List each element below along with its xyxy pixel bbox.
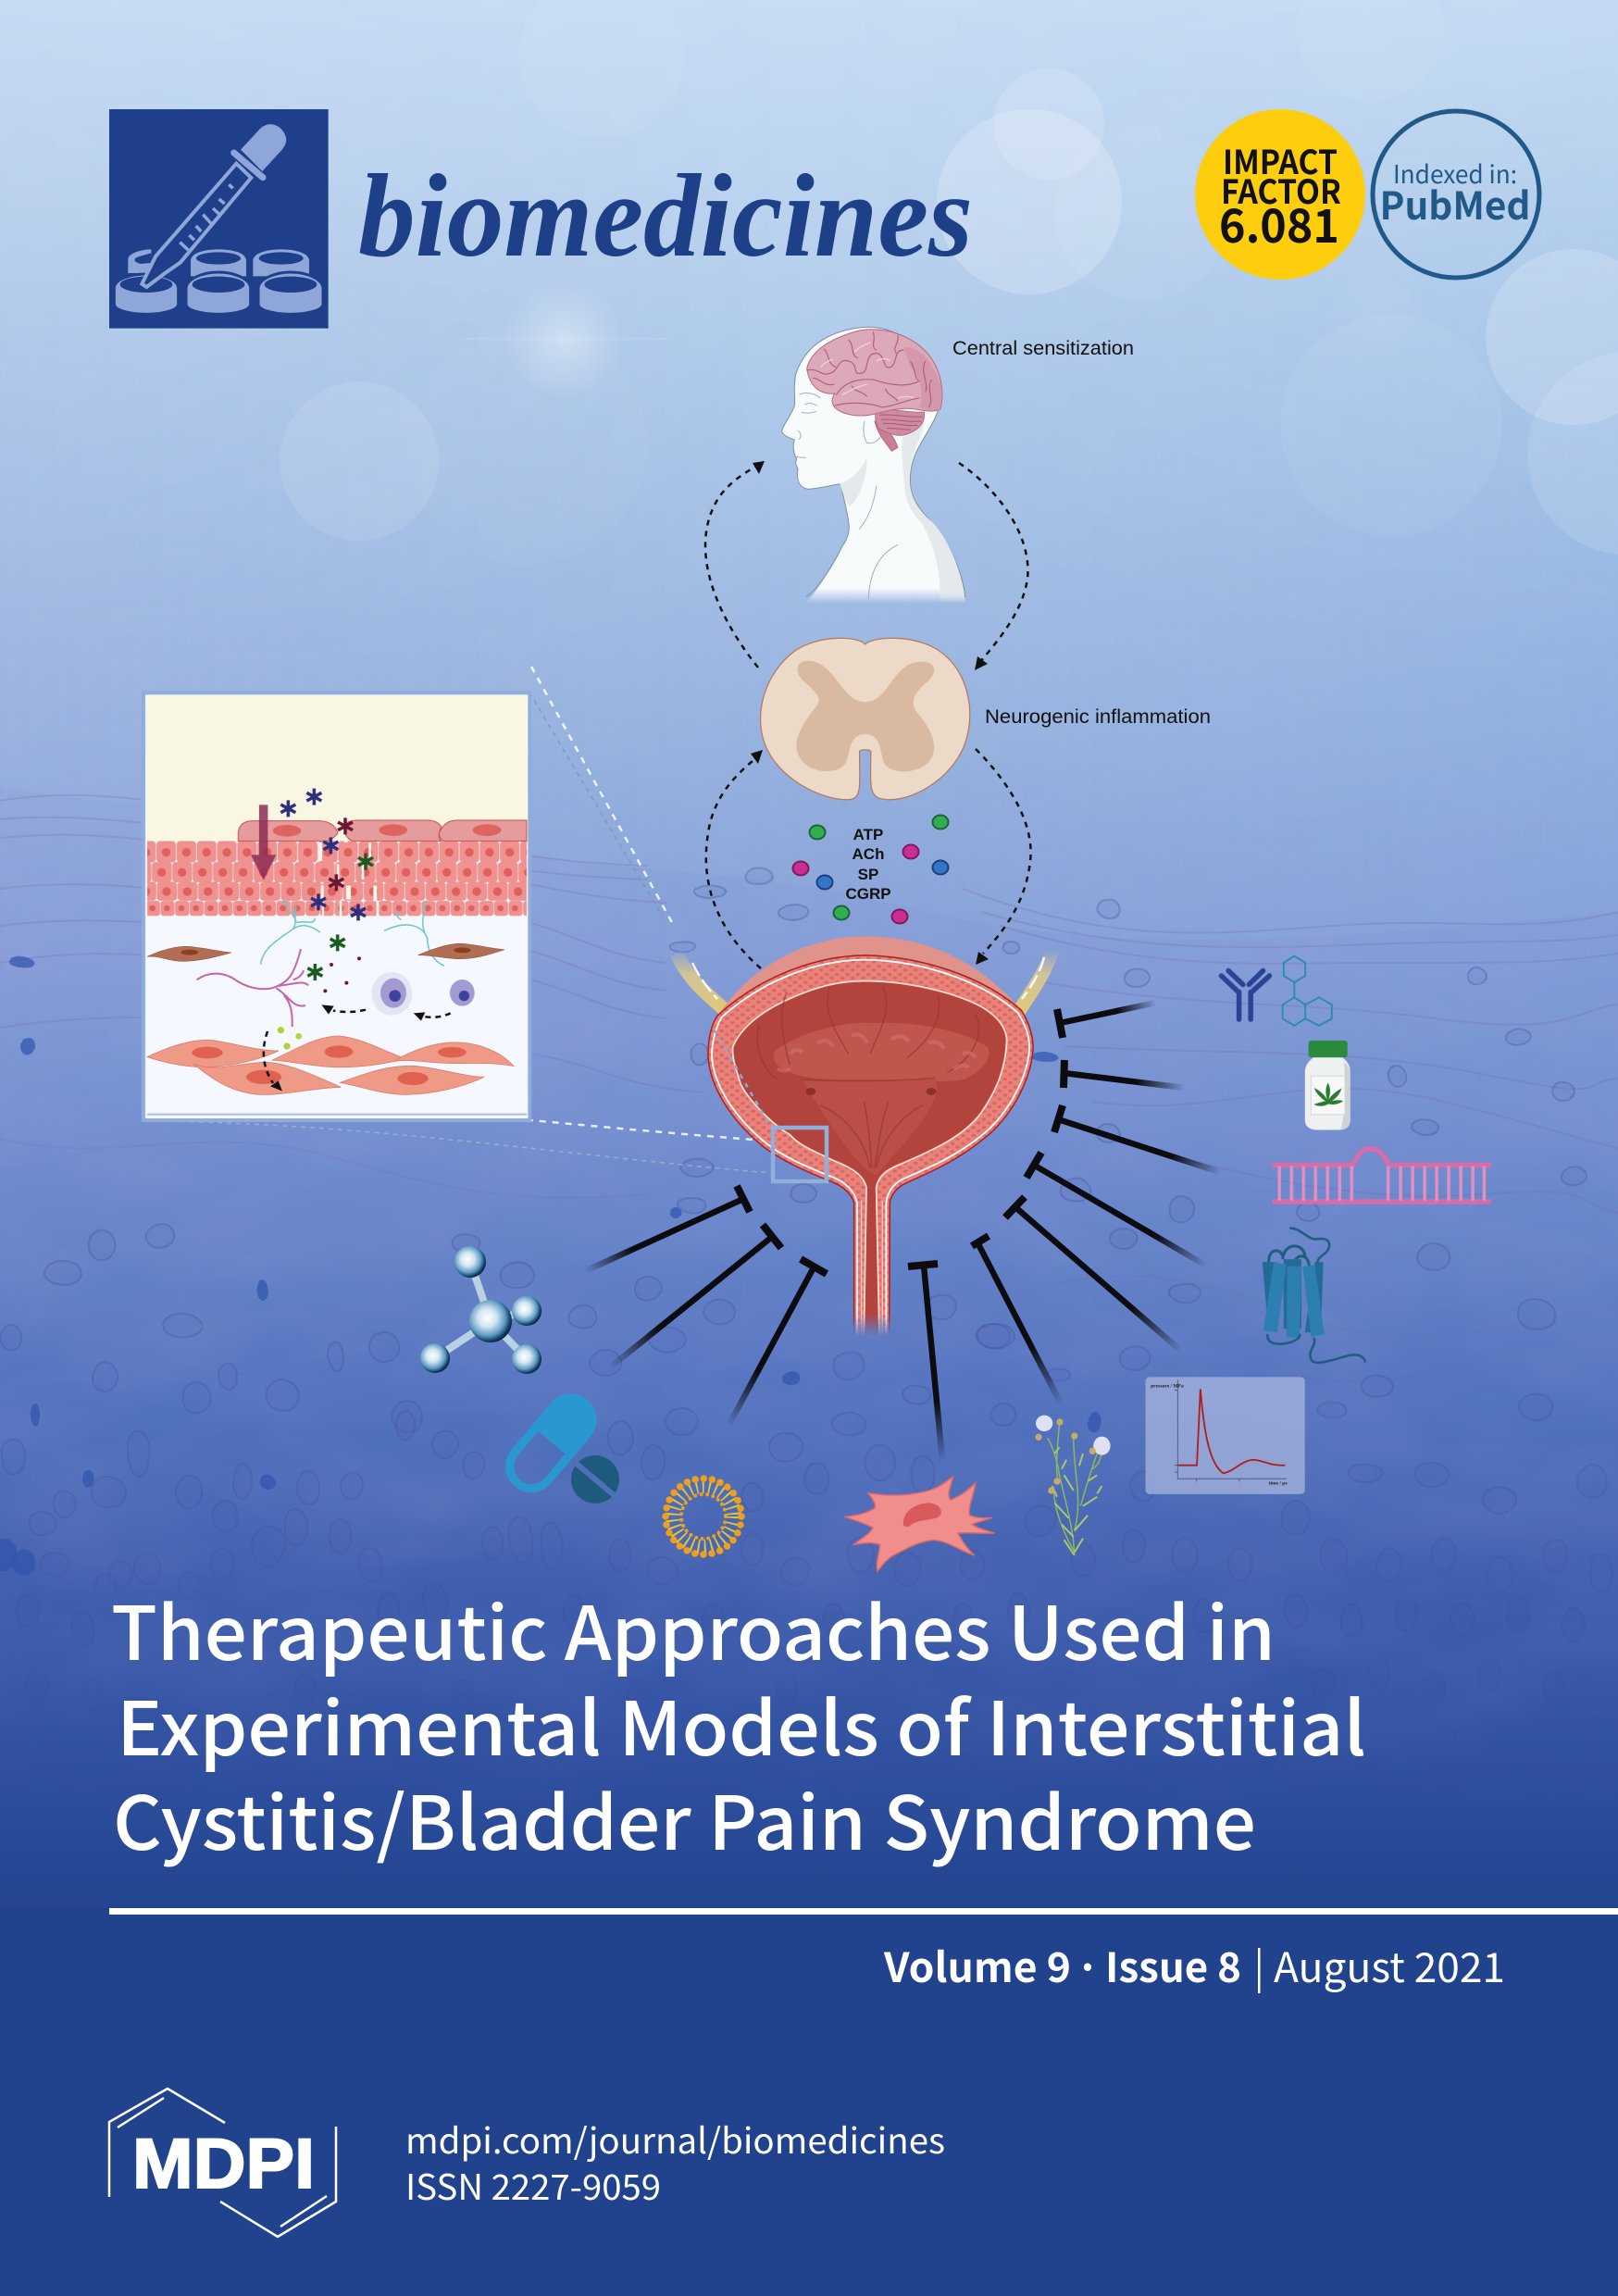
right icons group <box>1146 956 1491 1494</box>
neurotransmitter labels: ACh <box>853 845 884 863</box>
neurotransmitter labels: SP <box>858 866 878 883</box>
icon: antibody <box>1221 970 1269 1019</box>
bladder wall <box>708 955 1033 1336</box>
journal logo square <box>109 109 329 329</box>
asterisks: maroon <box>329 817 353 891</box>
icon: capsule <box>498 1383 607 1500</box>
sensory nerves teal <box>261 899 444 966</box>
head with brain <box>782 327 965 604</box>
article title: Experimental Models of Interstitial <box>117 1670 1366 1778</box>
icon: flax plant <box>1035 1416 1111 1555</box>
smooth muscle cells <box>147 1036 514 1094</box>
icon: molecule <box>420 1246 541 1374</box>
bladder <box>708 936 1033 1336</box>
asterisks: navy <box>280 789 366 920</box>
dashed black arrows <box>264 1004 451 1092</box>
volume and issue: Volume 9 <box>883 1935 1071 1994</box>
arrow: upper left dashed loop <box>705 461 765 668</box>
spinal cord <box>761 638 970 800</box>
impact factor badge: FACTOR <box>1221 166 1341 214</box>
inhibitor T-bars <box>585 1003 1220 1460</box>
icon: RNA hairpin <box>1273 1149 1491 1202</box>
impact factor badge <box>1195 109 1365 280</box>
icon: GPCR receptor <box>1263 1228 1365 1363</box>
neurotransmitter labels <box>845 826 891 903</box>
tissue nuclei <box>0 787 1618 1852</box>
arrow: lower left dashed loop <box>706 750 763 968</box>
icon: stellate stem cell <box>844 1477 995 1571</box>
neurotransmitter molecules <box>792 815 948 924</box>
PubMed badge: PubMed <box>1379 175 1531 231</box>
volume and issue <box>883 1935 1505 1994</box>
article title <box>111 1575 1366 1872</box>
arrow: lower right dashed loop <box>976 749 1031 965</box>
connector dashed lines <box>143 667 773 1173</box>
mediators and mast cells <box>278 956 475 1050</box>
arrow: down <box>251 805 276 880</box>
MDPI logo <box>109 2089 336 2237</box>
bladder trigone and rugae <box>757 986 989 1175</box>
icon: dropper <box>142 124 286 287</box>
impact factor badge: IMPACT <box>1223 136 1338 184</box>
cerebrum <box>807 330 942 416</box>
chart: pressure wave panel <box>1146 1377 1305 1494</box>
bladder lumen <box>733 981 1007 1336</box>
volume and issue: August 2021 <box>1274 1935 1505 1994</box>
journal title: biomedicines <box>358 150 973 281</box>
journal URL and ISSN <box>405 2113 945 2210</box>
urethra inner lines <box>862 1201 882 1336</box>
icon: chemical structure <box>1283 956 1332 1026</box>
fibroblasts <box>147 943 504 961</box>
neurotransmitter labels: CGRP <box>845 885 891 903</box>
epithelial cell rows <box>147 833 527 917</box>
journal URL and ISSN: mdpi.com/journal/biomedicines <box>405 2113 945 2164</box>
inset panel: urothelium histology <box>143 693 529 1120</box>
umbrella cells <box>238 820 527 841</box>
label: central sensitization: Central sensitization <box>952 338 1134 359</box>
lumen cream area <box>147 697 527 842</box>
icon: cannabis bottle <box>1305 1041 1350 1129</box>
bokeh light circles <box>148 0 1618 565</box>
background tissue texture <box>0 787 1618 1907</box>
sensory nerve pink <box>197 949 308 1027</box>
asterisks: green <box>307 854 373 980</box>
impact factor badge: 6.081 <box>1219 190 1339 256</box>
icon: well plate front row <box>114 272 323 314</box>
chart: pressure wave panel: pressure / MPa <box>1151 1383 1184 1389</box>
PubMed badge <box>1373 111 1539 278</box>
selection box <box>773 1128 827 1181</box>
neurotransmitter labels: ATP <box>853 826 883 843</box>
MDPI logo: MDPI <box>132 2125 315 2203</box>
icon: well plate back row <box>128 249 309 276</box>
neck shading <box>840 421 965 603</box>
cerebellum <box>875 409 925 451</box>
volume and issue: Issue 8 <box>1105 1935 1241 1994</box>
peritoneal cap <box>717 936 1021 1016</box>
icon: liposome <box>666 1479 741 1554</box>
ureters <box>677 949 1052 1013</box>
volume and issue: · <box>1076 1935 1100 1994</box>
label: neurogenic inflammation: Neurogenic inflammation <box>985 706 1211 728</box>
article title: Cystitis/Bladder Pain Syndrome <box>113 1765 1256 1872</box>
icon: tablet <box>560 1444 630 1515</box>
arrow: upper right dashed loop <box>959 463 1027 670</box>
bottom icons group <box>420 1246 1111 1571</box>
journal URL and ISSN: ISSN 2227-9059 <box>405 2159 661 2210</box>
PubMed badge: Indexed in: <box>1393 155 1517 191</box>
chart: pressure wave panel: time / µs <box>1269 1481 1288 1487</box>
article title: Therapeutic Approaches Used in <box>111 1575 1276 1682</box>
dotted line across bladder wall <box>715 1030 771 1128</box>
divider rule <box>109 1908 1618 1915</box>
